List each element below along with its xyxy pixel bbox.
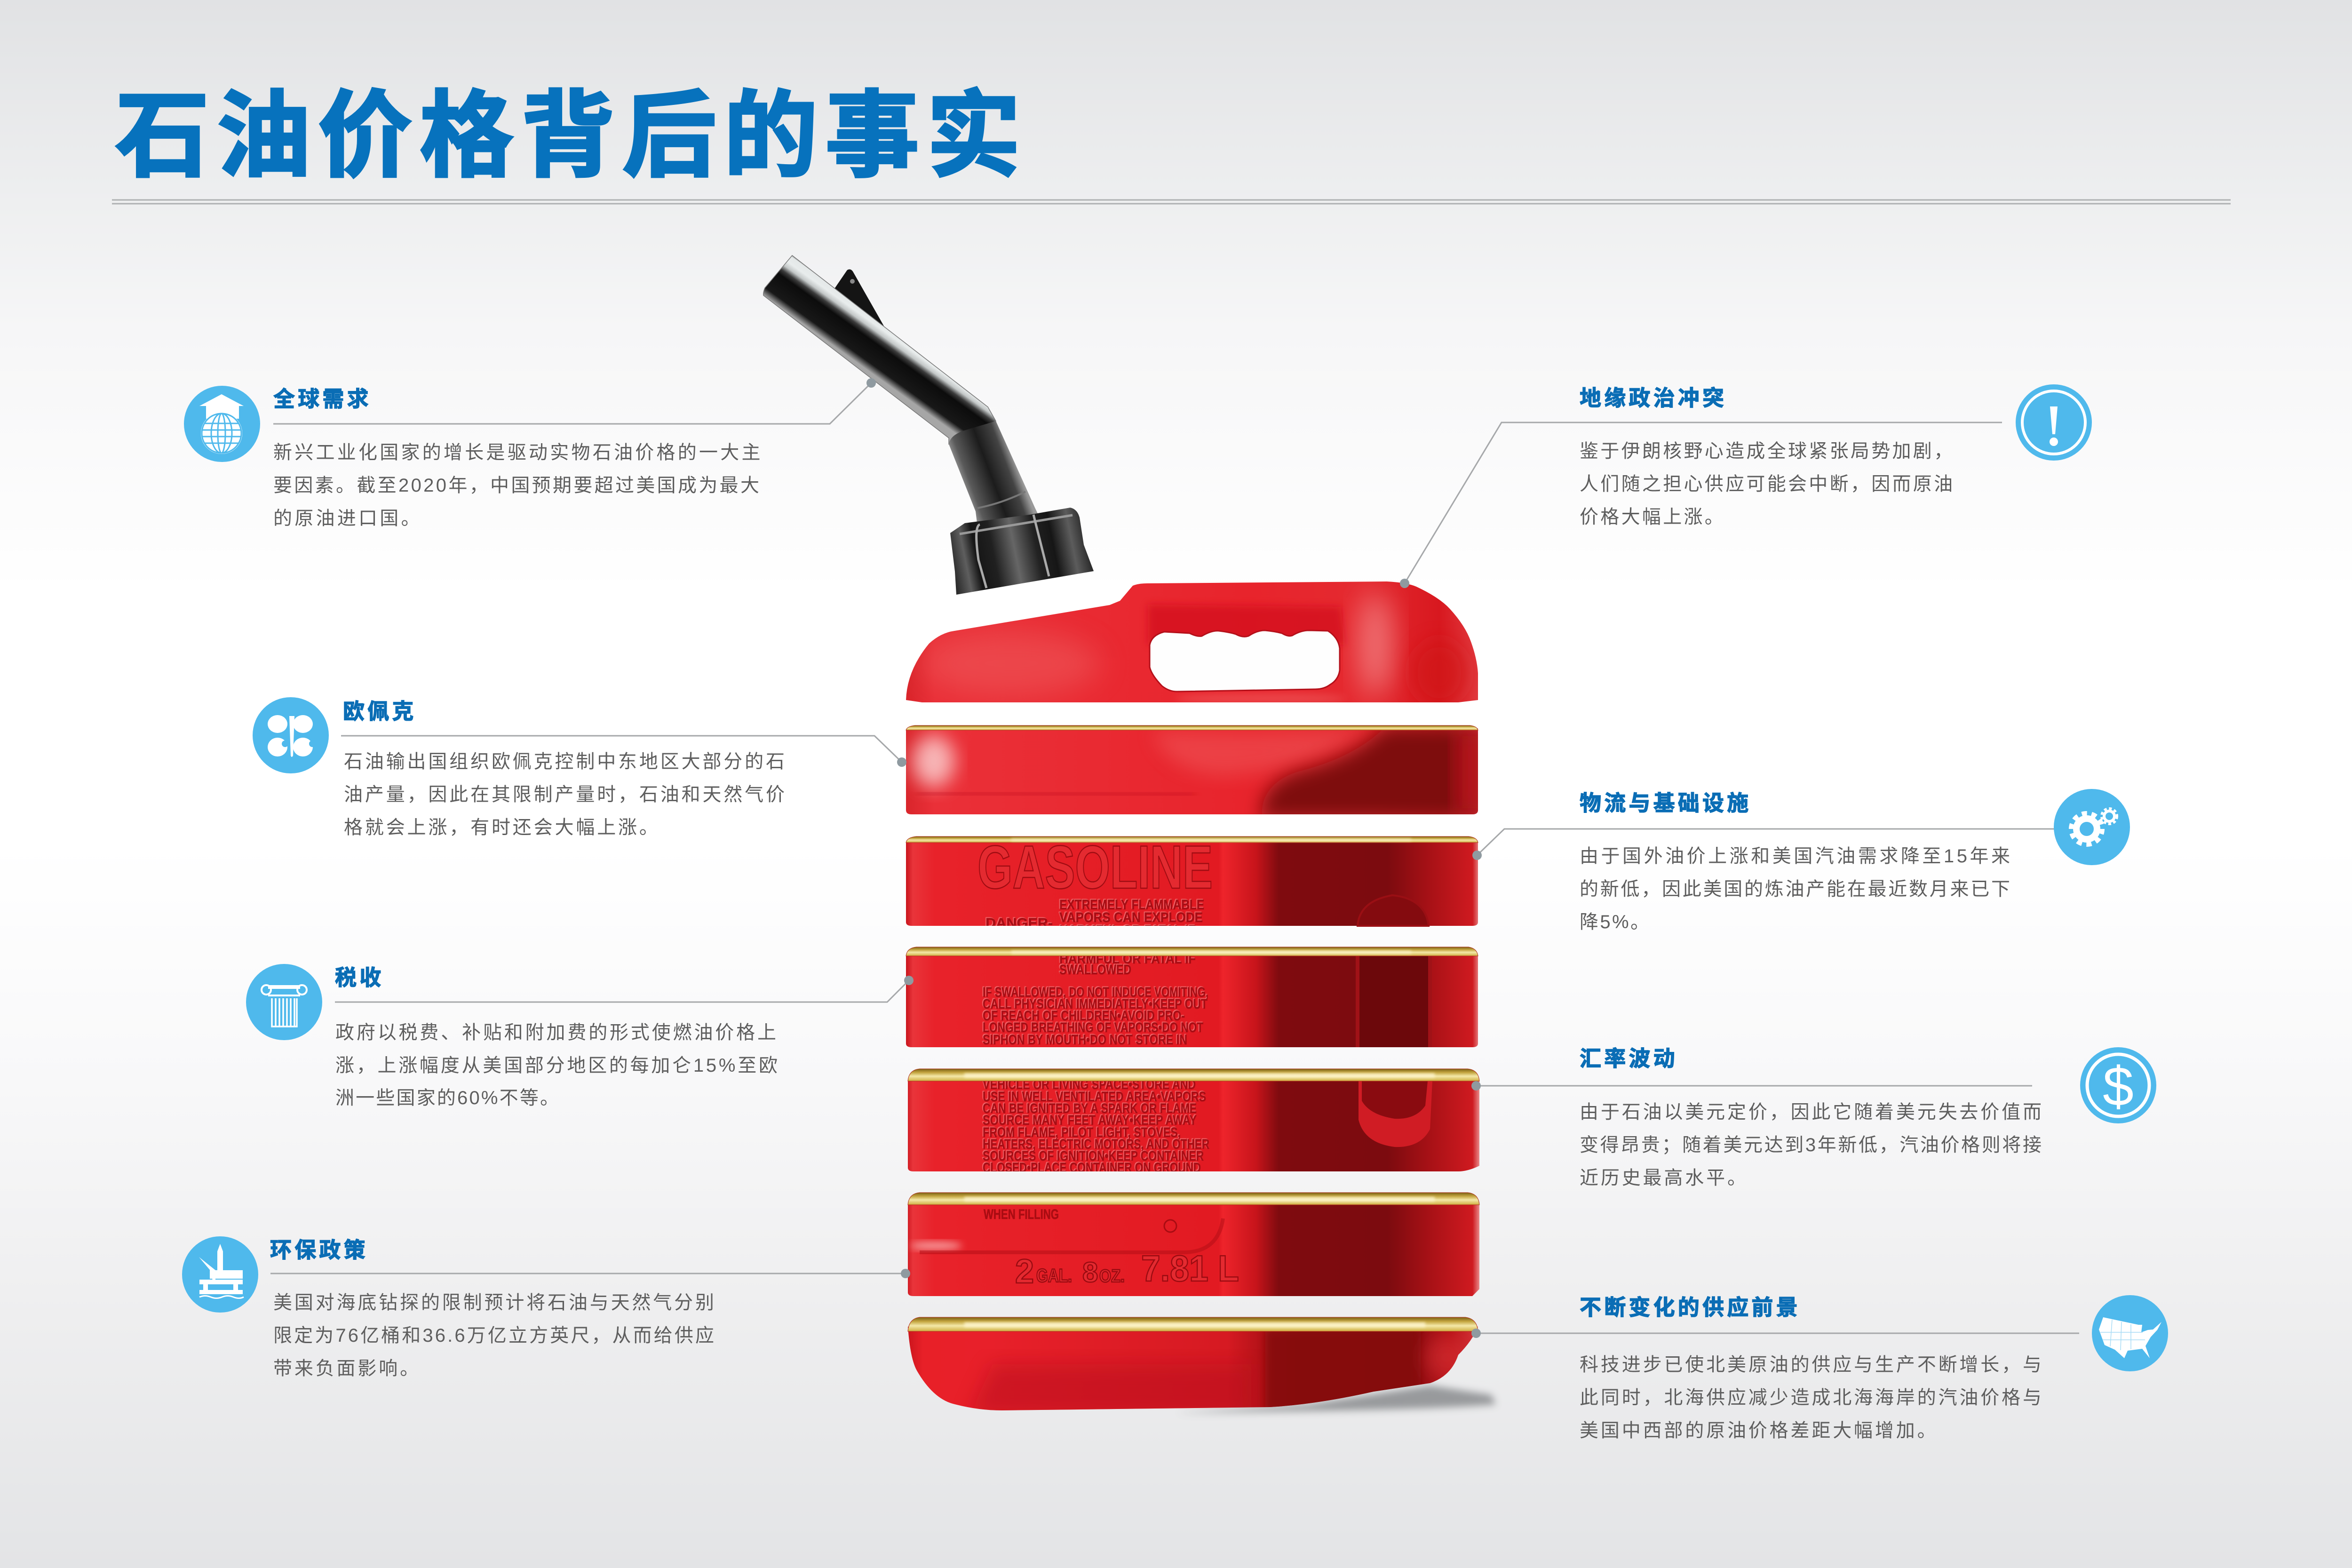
- jug label: gasoline: HARMFUL OR FATAL IF: [1059, 923, 1196, 938]
- jug warning text 4: OF REACH OF CHILDREN•AVOID PRO-: [983, 1008, 1185, 1024]
- text: 科技进步已使北美原油的供应与生产不断增长，与: [1580, 1354, 2042, 1375]
- text: 新兴工业化国家的增长是驱动实物石油价格的一大主: [273, 442, 763, 463]
- text: 由于石油以美元定价，因此它随着美元失去价值而: [1580, 1102, 2042, 1122]
- text: [1580, 846, 2010, 932]
- jug rim 4: [906, 947, 1478, 956]
- jug label: gasoline: [977, 833, 1213, 938]
- jug section 1: handle top: [906, 581, 1478, 706]
- jug section 6: capacity: [908, 1193, 1479, 1296]
- jug section 2: [906, 725, 1484, 819]
- text: [1580, 1354, 2042, 1441]
- icon: gears: [2054, 789, 2130, 865]
- text: 石油输出国组织欧佩克控制中东地区大部分的石: [344, 751, 787, 772]
- jug label: gasoline: GASOLINE: [977, 833, 1213, 901]
- heading: 全球需求: [273, 387, 372, 411]
- jug warning text 5: SOURCES OF IGNITION•KEEP CONTAINER: [983, 1148, 1204, 1164]
- panel: logistics and infrastructure: [1472, 789, 2130, 932]
- jug label: gasoline: EXTREMELY FLAMMABLE: [1059, 897, 1204, 913]
- heading: 欧佩克: [343, 699, 417, 724]
- panel: global demand: [184, 378, 876, 529]
- text: 油产量，因此在其限制产量时，石油和天然气价: [344, 784, 787, 805]
- jug warning text 5: SOURCE MANY FEET AWAY•KEEP AWAY: [983, 1113, 1197, 1128]
- jug warning text 5: CLOSED•PLACE CONTAINER ON GROUND: [983, 1160, 1201, 1176]
- jug: [906, 581, 1496, 1416]
- icon: column: [246, 964, 322, 1040]
- icon: oil rig: [182, 1236, 258, 1313]
- text: 带来负面影响。: [273, 1358, 421, 1379]
- text: [273, 1292, 716, 1379]
- text: 洲一些国家的60%不等。: [335, 1088, 559, 1108]
- text: [1580, 1102, 2042, 1188]
- jug recess 5: [1359, 1081, 1432, 1147]
- leader line: [273, 378, 876, 424]
- jug capacity marking: WHEN FILLING: [984, 1207, 1059, 1222]
- heading: 税收: [335, 965, 384, 990]
- jug capacity marking: OZ.: [1099, 1266, 1125, 1286]
- jug capacity marking: 2: [1015, 1253, 1034, 1290]
- jug capacity marking: [984, 1207, 1239, 1290]
- jug capacity marking: 8: [1082, 1257, 1098, 1288]
- leader line: [1472, 829, 2054, 860]
- text: 涨，上涨幅度从美国部分地区的每加仑15%至欧: [335, 1055, 778, 1076]
- text: 此同时，北海供应减少造成北海海岸的汽油价格与: [1580, 1387, 2042, 1408]
- icon: dollar: $: [2103, 1056, 2134, 1118]
- jug capacity marking: 7.81 L: [1141, 1248, 1239, 1289]
- jug section 7: base: [908, 1317, 1478, 1416]
- text: 近历史最高水平。: [1580, 1168, 1748, 1188]
- spout sleeve: [949, 421, 1040, 527]
- icon: OPEC logo: [253, 697, 329, 773]
- title rule: [112, 200, 2231, 204]
- icon: dollar: [2080, 1047, 2156, 1123]
- heading: 地缘政治冲突: [1580, 386, 1727, 410]
- text: 的新低，因此美国的炼油产能在最近数月来已下: [1580, 879, 2010, 899]
- jug rim 5: [908, 1069, 1479, 1081]
- jug warning text 4: CALL PHYSICIAN IMMEDIATELY•KEEP OUT: [983, 996, 1208, 1012]
- leader line: [270, 1269, 910, 1278]
- text: [273, 442, 763, 529]
- text: 鉴于伊朗核野心造成全球紧张局势加剧，: [1580, 441, 1955, 462]
- text: 美国对海底钻探的限制预计将石油与天然气分别: [273, 1292, 716, 1313]
- panel: taxes: [246, 964, 914, 1108]
- text: 价格大幅上涨。: [1580, 507, 1725, 527]
- jug warning text 5: FROM FLAME, PILOT LIGHT, STOVES,: [983, 1125, 1181, 1140]
- leader line: [1471, 1081, 2032, 1090]
- jug warning text 5: HEATERS, ELECTRIC MOTORS, AND OTHER: [983, 1137, 1209, 1152]
- jug warning text 4: IF SWALLOWED, DO NOT INDUCE VOMITING,: [983, 985, 1208, 1000]
- jug label: gasoline: DANGER-: [985, 915, 1053, 931]
- panel: changing supply outlook: [1471, 1295, 2168, 1441]
- text: 降5%。: [1580, 912, 1649, 932]
- heading: 物流与基础设施: [1580, 791, 1751, 815]
- heading: 汇率波动: [1580, 1046, 1678, 1071]
- jug section 5: [908, 1069, 1479, 1176]
- jug warning text 4: LONGED BREATHING OF VAPORS•DO NOT: [983, 1020, 1203, 1035]
- jug warning text 5: [983, 1077, 1209, 1176]
- jug capacity marking: GAL.: [1036, 1266, 1072, 1286]
- spout and cap: [763, 255, 1094, 595]
- panel: OPEC: [253, 697, 906, 838]
- text: [1580, 441, 1955, 527]
- jug rim 3: [906, 836, 1478, 843]
- panel: exchange rate: [1471, 1046, 2156, 1188]
- text: 人们随之担心供应可能会中断，因而原油: [1580, 474, 1955, 494]
- text: 的原油进口国。: [273, 508, 422, 529]
- jug recess 3: [1358, 895, 1429, 926]
- leader line: [341, 736, 906, 767]
- jug warning text 4: SWALLOWED: [1059, 962, 1131, 978]
- jug rim 2: [906, 725, 1478, 730]
- text: 美国中西部的原油价格差距大幅增加。: [1580, 1420, 1938, 1441]
- text: 由于国外油价上涨和美国汽油需求降至15年来: [1580, 846, 2010, 867]
- jug handle opening: [1150, 630, 1340, 692]
- panel: geopolitical conflict: [1400, 384, 2092, 588]
- spout tube: [763, 255, 996, 444]
- leader line: [1400, 422, 2002, 588]
- cap: [950, 508, 1094, 595]
- icon: USA map: [2092, 1295, 2168, 1371]
- jug warning text 5: VEHICLE OR LIVING SPACE•STORE AND: [983, 1077, 1196, 1092]
- panel: environmental policy: [182, 1236, 910, 1379]
- text: [344, 751, 787, 838]
- jug warning text 4: SIPHON BY MOUTH•DO NOT STORE IN: [983, 1032, 1187, 1048]
- heading: 环保政策: [270, 1238, 368, 1262]
- text: 限定为76亿桶和36.6万亿立方英尺，从而给供应: [273, 1325, 714, 1346]
- jug warning text 4: [983, 951, 1208, 1048]
- jug rim 7: [908, 1317, 1478, 1331]
- spout fin: [834, 270, 888, 333]
- jug warning text 5: CAN BE IGNITED BY A SPARK OR FLAME: [983, 1101, 1197, 1116]
- heading: 不断变化的供应前景: [1580, 1295, 1801, 1320]
- jug recess 4: [1358, 956, 1430, 1047]
- text: [335, 1022, 779, 1108]
- text: 格就会上涨，有时还会大幅上涨。: [344, 817, 660, 838]
- icon: globe with arrow: [184, 386, 260, 462]
- leader line: [1471, 1329, 2079, 1338]
- jug rim 6: [908, 1193, 1479, 1205]
- jug base shadow: [1176, 1385, 1496, 1413]
- text: 变得昂贵；随着美元达到3年新低，汽油价格则将接: [1580, 1135, 2042, 1155]
- icon: exclamation: [2016, 384, 2092, 461]
- text: 要因素。截至2020年，中国预期要超过美国成为最大: [273, 475, 759, 496]
- jug section 3: GASOLINE: [906, 833, 1478, 938]
- jug label: gasoline: VAPORS CAN EXPLODE: [1059, 910, 1203, 925]
- jug section 4: [906, 947, 1478, 1048]
- jug warning text 4: HARMFUL OR FATAL IF: [1059, 951, 1196, 967]
- leader line: [335, 976, 914, 1002]
- jug warning text 5: USE IN WELL VENTILATED AREA•VAPORS: [983, 1089, 1206, 1105]
- text: 政府以税费、补贴和附加费的形式使燃油价格上: [335, 1022, 779, 1043]
- title: 石油价格背后的事实: [115, 84, 1028, 189]
